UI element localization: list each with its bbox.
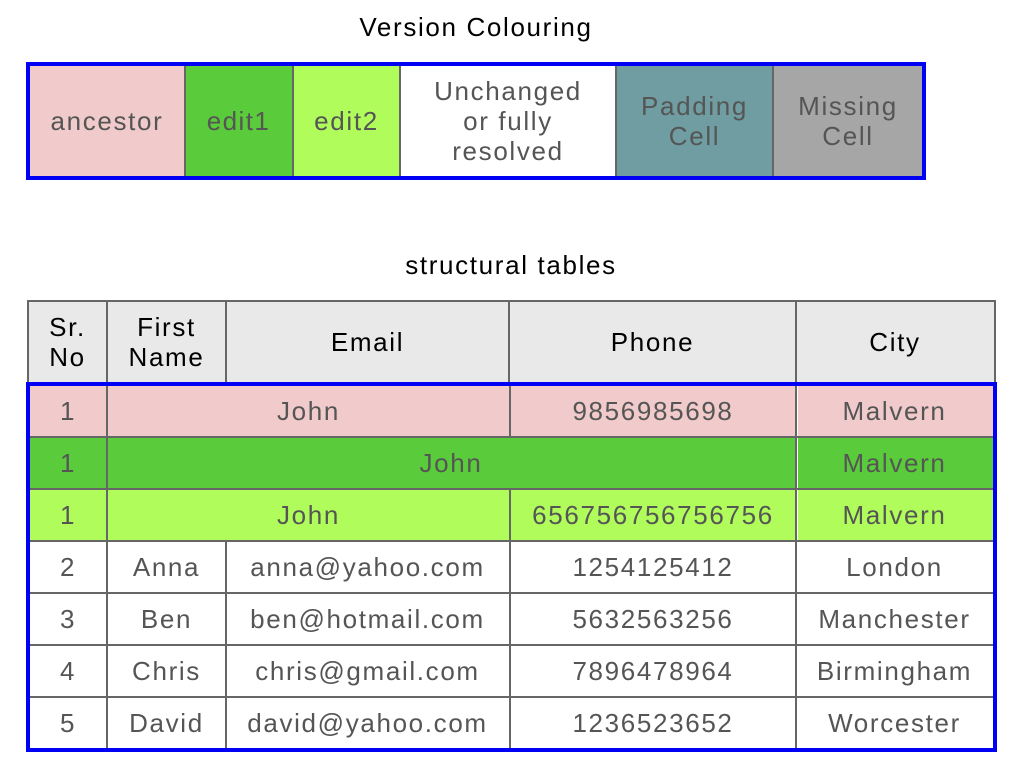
row: Chris	[60, 656, 972, 686]
row: edit1 version of record 1: Malvern	[842, 448, 947, 478]
row: Chris: 7896478964	[572, 656, 734, 686]
row: Ben: 3	[60, 604, 76, 634]
row: edit2 version of record 1: Malvern	[842, 500, 947, 530]
row: Anna: Anna	[133, 552, 200, 582]
row: ancestor version of record 1: John	[277, 396, 340, 426]
row: Anna: anna@yahoo.com	[250, 552, 485, 582]
legend cell: missing cell: Missing	[798, 91, 898, 121]
panel: version colour legend	[26, 62, 926, 180]
legend cell: unchanged or fully resolved: or fully	[463, 106, 553, 136]
legend cell: unchanged or fully resolved: Unchanged	[434, 76, 582, 106]
legend cell: missing cell	[774, 66, 922, 176]
row: edit1 version of record 1: John	[420, 448, 482, 478]
row: David: 5	[60, 708, 76, 738]
row: Ben: 5632563256	[572, 604, 734, 634]
row: Chris: chris@gmail.com	[255, 656, 480, 686]
row: Ben: ben@hotmail.com	[250, 604, 485, 634]
legend cell: edit2	[294, 66, 399, 176]
panel: structural table	[26, 300, 997, 752]
row: Chris: Birmingham	[817, 656, 972, 686]
legend cell: padding cell: Padding	[641, 91, 748, 121]
header: Sr. No: No	[49, 342, 86, 372]
header: Phone	[510, 302, 795, 382]
title: version colouring: Version Colouring	[359, 12, 593, 42]
legend blue outline	[26, 62, 926, 180]
row: ancestor version of record 1: 1	[60, 396, 76, 426]
legend cell: edit2: edit2	[314, 106, 379, 136]
row: edit2 version of record 1: John	[277, 500, 340, 530]
row: ancestor version of record 1: Malvern	[842, 396, 947, 426]
row: David: david@yahoo.com	[247, 708, 488, 738]
row: edit2 version of record 1	[30, 490, 993, 540]
header: Sr. No: Sr.	[49, 312, 86, 342]
header: First Name	[108, 302, 225, 382]
row: David: David	[129, 708, 204, 738]
row: David: Worcester	[828, 708, 961, 738]
table header row	[27, 300, 996, 384]
row: Anna	[60, 552, 943, 582]
legend cell: padding cell	[617, 66, 772, 176]
legend cell: missing cell: Cell	[822, 121, 874, 151]
row: Chris: Chris	[132, 656, 201, 686]
legend cell: ancestor	[30, 66, 184, 176]
row: David: 1236523652	[572, 708, 734, 738]
legend cell: unchanged or fully resolved: resolved	[452, 136, 564, 166]
header: City	[797, 302, 994, 382]
header: Email	[227, 302, 508, 382]
legend cell: ancestor: ancestor	[51, 106, 163, 136]
header: Phone: Phone	[611, 327, 694, 357]
header: First Name: Name	[129, 342, 204, 372]
row: edit1 version of record 1: 1	[60, 448, 76, 478]
row: Chris: 4	[60, 656, 76, 686]
row: Anna: 1254125412	[572, 552, 734, 582]
row: edit2 version of record 1: 1	[60, 500, 76, 530]
heading: structural tables: structural tables	[405, 250, 617, 280]
legend cell: edit1: edit1	[207, 106, 270, 136]
header: Sr. No	[29, 302, 106, 382]
row: Ben: Manchester	[818, 604, 971, 634]
row: David	[60, 708, 961, 738]
row: edit2 version of record 1: 656756756756756	[532, 500, 774, 530]
row: ancestor version of record 1: 9856985698	[572, 396, 734, 426]
row: ancestor version of record 1	[30, 386, 993, 436]
row: edit1 version of record 1	[30, 438, 993, 488]
legend cell: padding cell: Cell	[669, 121, 720, 151]
legend cell: unchanged or fully resolved	[401, 66, 615, 176]
legend cell: edit1	[186, 66, 292, 176]
row: Ben: Ben	[141, 604, 192, 634]
header: Email: Email	[331, 327, 404, 357]
row: Anna: 2	[60, 552, 76, 582]
header: First Name: First	[137, 312, 196, 342]
row: Anna: London	[846, 552, 943, 582]
header: City: City	[869, 327, 921, 357]
table body blue outline	[26, 382, 997, 752]
row: Ben	[60, 604, 971, 634]
